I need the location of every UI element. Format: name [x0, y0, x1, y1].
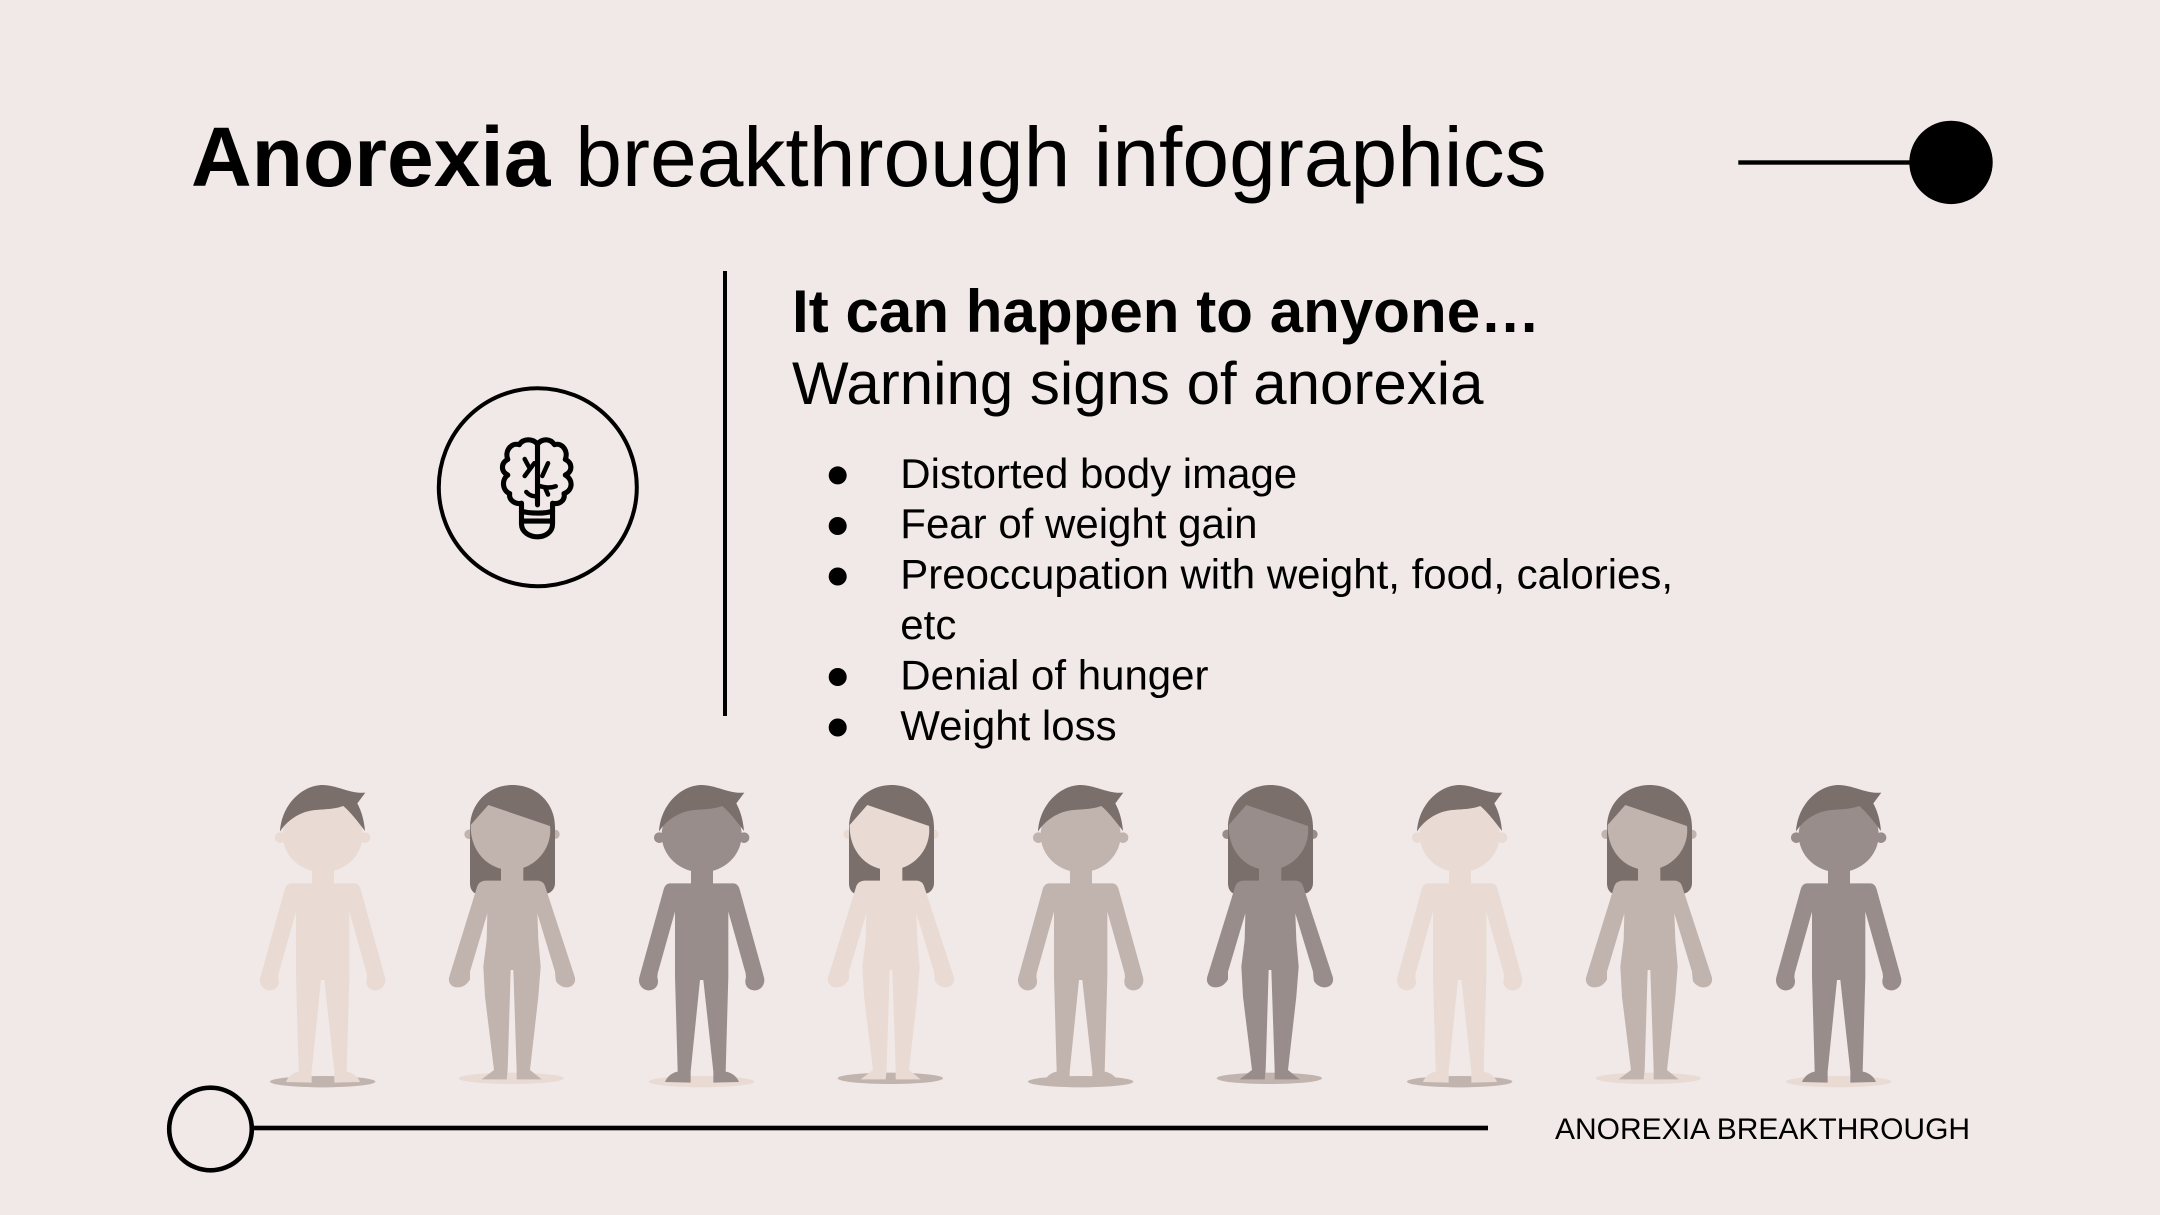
list: warning signs bullets: Distorted body image — [900, 450, 1297, 497]
person 7: man, light — [1397, 785, 1522, 1087]
decorative bottom circle and line — [169, 1088, 1488, 1170]
icon: brain light bulb in circle — [439, 388, 637, 586]
vertical divider — [723, 271, 727, 716]
title: Anorexia breakthrough infographics — [191, 110, 1547, 204]
list: warning signs bullets: Weight loss — [900, 702, 1117, 749]
list: warning signs bullets: Fear of weight gain — [900, 500, 1258, 547]
figure row: nine people — [260, 785, 1901, 1087]
person 4: woman, light — [828, 785, 954, 1084]
person 5: man, medium — [1018, 785, 1143, 1087]
person 8: woman, medium — [1586, 785, 1712, 1084]
person 3: man, dark — [639, 785, 764, 1087]
person 1: man, light — [260, 785, 385, 1087]
person 2: woman, medium — [449, 785, 575, 1084]
person 6: woman, dark — [1207, 785, 1333, 1084]
list: warning signs bullets: etc — [900, 601, 956, 648]
list: warning signs bullets: Preoccupation with weight, food, calories, — [900, 551, 1673, 598]
list: warning signs bullets — [829, 450, 1673, 749]
decorative top-right line and dot — [1738, 121, 1993, 204]
heading: it can happen to anyone: It can happen to anyone… — [792, 278, 1540, 345]
footer label: ANOREXIA BREAKTHROUGH — [1555, 1113, 1970, 1146]
person 9: man, dark — [1776, 785, 1901, 1087]
subheading: warning signs: Warning signs of anorexia — [792, 350, 1484, 417]
list: warning signs bullets: Denial of hunger — [900, 652, 1209, 699]
